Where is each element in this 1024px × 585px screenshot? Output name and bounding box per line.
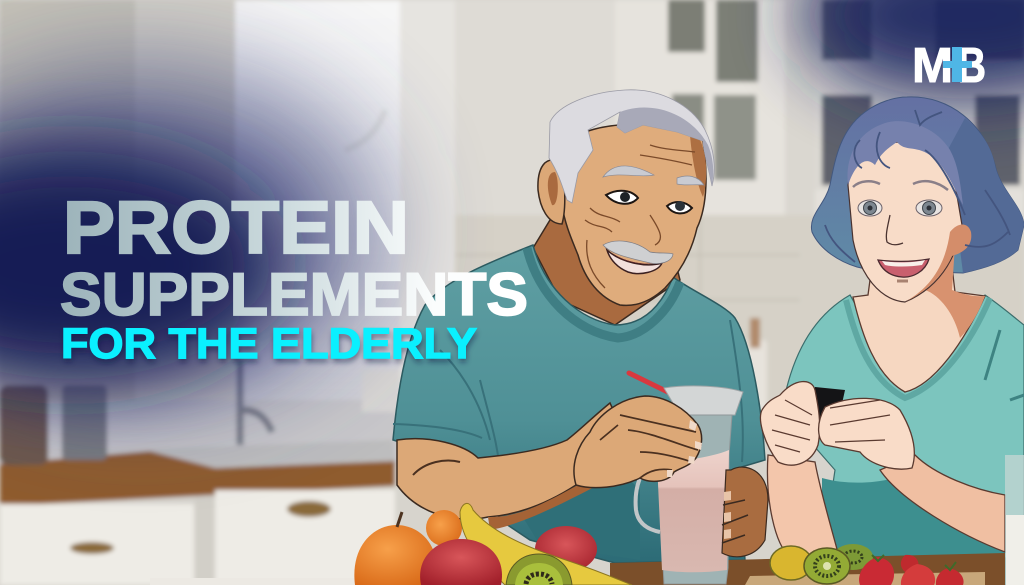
- woman collar: [846, 298, 990, 398]
- man shirt: [393, 245, 765, 563]
- title line 1: PROTEIN: [63, 186, 409, 269]
- banana: [460, 503, 632, 585]
- man: [393, 90, 765, 563]
- woman mouth: [878, 259, 929, 277]
- man arm shadow: [488, 484, 600, 530]
- jug milkshake: [657, 450, 729, 572]
- man hair: [549, 90, 714, 203]
- woman eyebrows: [853, 181, 948, 190]
- fruit pile: [354, 503, 632, 585]
- man neck: [533, 215, 680, 325]
- logo: [912, 39, 986, 93]
- woman nose: [886, 215, 903, 245]
- logo: B: [958, 39, 986, 93]
- woman hair fringe: [847, 121, 963, 205]
- black cap: [812, 387, 845, 428]
- man mouth: [607, 250, 662, 274]
- woman shirt lower shade: [822, 478, 1005, 558]
- woman left arm: [767, 455, 838, 557]
- title: [60, 186, 528, 372]
- title line 2: SUPPLEMENTS: [60, 261, 528, 328]
- man head: [562, 124, 706, 305]
- logo: M: [912, 39, 953, 93]
- woman eyes: [858, 200, 882, 216]
- woman shirt folds: [985, 330, 1024, 400]
- man eyebrows: [603, 166, 704, 185]
- man fingernails: [667, 420, 702, 477]
- jug handle: [636, 462, 660, 532]
- jug lid: [664, 386, 743, 415]
- red apple front: [420, 539, 502, 585]
- man eyes: [606, 191, 638, 204]
- woman right hand: [819, 398, 914, 469]
- man face shadow: [690, 135, 706, 197]
- man wrinkles and nose: [585, 145, 695, 288]
- title line 3: FOR THE ELDERLY: [61, 320, 477, 368]
- woman hair dark side: [945, 118, 1024, 273]
- kiwi and strawberries: [770, 544, 964, 585]
- woman ear and face shadow: [905, 224, 971, 302]
- shake jug: [636, 386, 743, 584]
- man fingers on jug: [722, 467, 768, 557]
- man shirt collar and folds: [527, 248, 680, 338]
- orange: [354, 525, 438, 585]
- woman hair back: [811, 97, 1024, 273]
- glass of milk: [1005, 455, 1024, 585]
- man left arm: [397, 403, 640, 519]
- woman shirt: [785, 295, 1024, 585]
- small orange: [426, 510, 462, 546]
- woman: [760, 97, 1024, 585]
- red straw: [629, 373, 678, 397]
- woman head: [848, 142, 962, 302]
- dark blue gradient overlay: [0, 0, 1024, 395]
- table: [150, 553, 1005, 585]
- woman right arm: [880, 455, 1005, 552]
- title line 3 shadow: FOR THE ELDERLY: [62, 324, 478, 372]
- red apple back: [535, 526, 597, 572]
- woman neck and chest: [853, 250, 985, 392]
- woman left hand: [760, 382, 820, 465]
- jug glass: [658, 415, 732, 584]
- man moustache: [603, 241, 673, 264]
- kiwi slice: [506, 554, 572, 585]
- man upper hand: [574, 396, 702, 488]
- man ear: [538, 160, 565, 224]
